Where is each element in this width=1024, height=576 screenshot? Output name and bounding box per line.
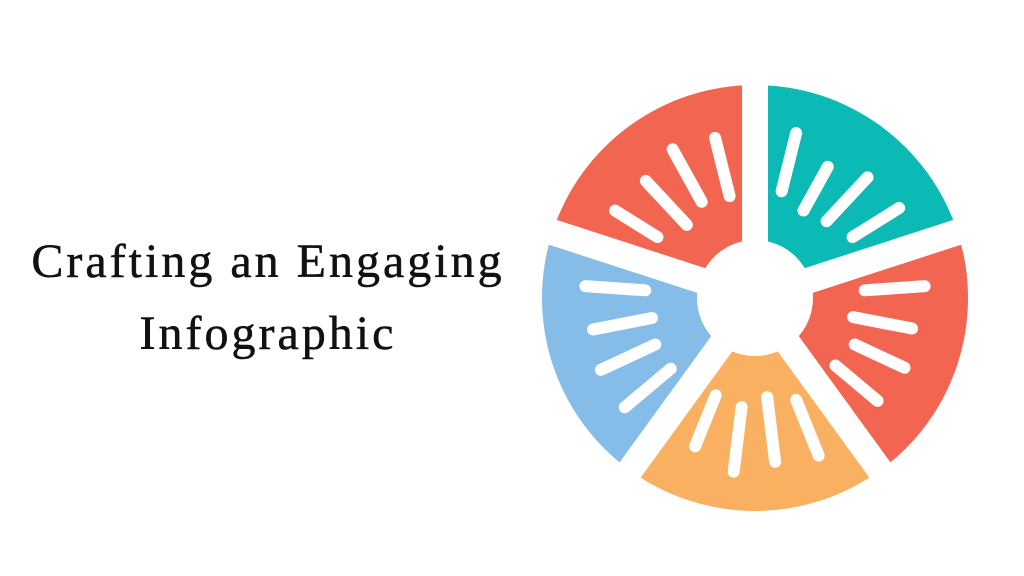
segment: blue left (542, 232, 755, 470)
segment: teal top-right (755, 85, 958, 298)
title (31, 235, 505, 360)
title: Infographic (140, 307, 396, 360)
hub (697, 240, 813, 356)
segment: orange bottom (630, 298, 880, 511)
dashes (585, 133, 925, 472)
segment: red top-left (552, 85, 755, 298)
segment: red right (755, 232, 968, 470)
title: Crafting an Engaging (31, 235, 505, 288)
